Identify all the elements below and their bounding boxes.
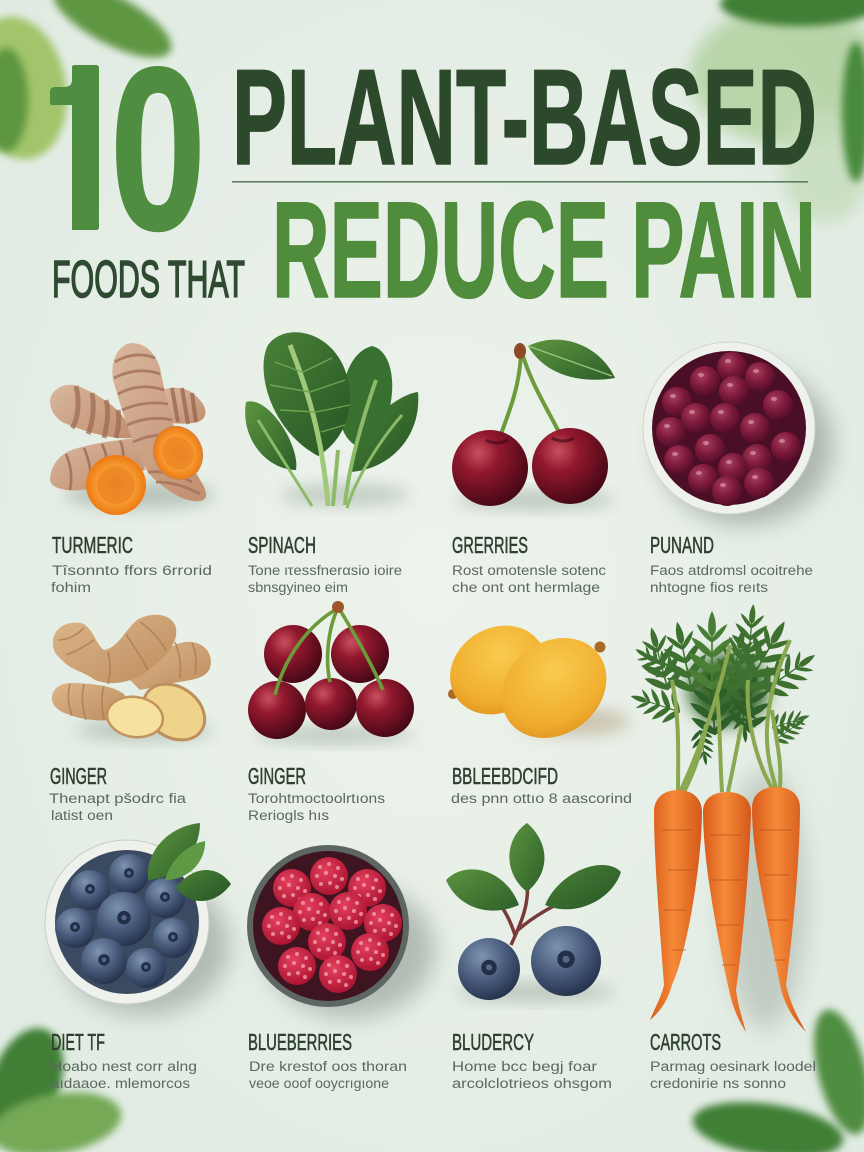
title — [50, 65, 814, 300]
decorative leaves: bottom right — [689, 1004, 864, 1152]
title number 10: 0 — [110, 20, 206, 279]
decorative leaves: top left — [0, 0, 182, 167]
description: punand: nhtogne fios reıts — [650, 580, 768, 595]
panel: raspberry bowl — [247, 845, 435, 1091]
icon: bowl of raspberries — [247, 845, 435, 1018]
panel: cherry cluster — [248, 601, 415, 823]
description: bluderly: arcolclotrieos ohsgom — [452, 1076, 612, 1091]
icon: two cherries with leaf — [452, 340, 615, 509]
decorative leaves: top right — [690, 0, 864, 223]
description: ginger — [49, 791, 187, 823]
label: punand: PUNAND — [650, 532, 714, 558]
description: cherries: Rost omotensle sotenc — [452, 563, 606, 578]
icon: bowl of dark berries — [643, 342, 833, 525]
description: ginger: latist oen — [51, 808, 113, 823]
description: spinach: Tone ιτessfnerαsio ioire — [248, 563, 402, 578]
label: cherries: GRERRIES — [452, 532, 528, 558]
description: blueberries: Dre krestof oos thoran — [249, 1059, 407, 1074]
label: bluderly: BLUDERCY — [452, 1029, 534, 1055]
description: ginger: Thenapt pšodrc fia — [49, 791, 187, 806]
description: cherries: che ont ont hermlage — [452, 580, 600, 595]
label: carrots: CARROTS — [650, 1029, 721, 1055]
panel: blueberry bowl — [45, 823, 231, 1091]
description: bbleebdcifd: des pnn ottıo 8 aascorind — [451, 791, 632, 806]
description: turmeric — [51, 563, 212, 595]
icon: spinach leaves — [245, 332, 418, 508]
description: spinach — [248, 563, 402, 595]
icon: bowl of blueberries with leaves — [45, 823, 231, 1015]
label: bbleebdcifd: BBLEEBDCIFD — [452, 763, 558, 789]
description: bluderly — [452, 1059, 612, 1091]
description: ginger second — [248, 791, 385, 823]
title number 10: 1 — [50, 21, 100, 280]
label: spinach: SPINACH — [248, 532, 316, 558]
description: turmeric: Tîsonnto ffors 6rrorid — [52, 563, 212, 578]
description: bluderly: Home bcc begj foar — [452, 1059, 598, 1074]
title line: foods that: FOODS THAT — [52, 251, 245, 309]
icon: two yellow fruits — [433, 608, 630, 759]
description: ginger second: Reriogls hıs — [248, 808, 329, 823]
description: carrots: credonirie ns sonno — [650, 1076, 786, 1091]
label: ginger second: GINGER — [248, 763, 306, 789]
description: punand: Faos atdromsl ocoitrehe — [650, 563, 813, 578]
icon: three carrots with greens — [626, 602, 826, 1032]
icon: cherry cluster — [248, 601, 415, 743]
description: carrots — [650, 1059, 816, 1091]
panel: cherries — [452, 340, 615, 595]
icon: turmeric roots — [50, 343, 215, 515]
description: spinach: sbnsgyineo eim — [248, 580, 348, 595]
title number 10 — [50, 65, 200, 232]
icon: two blueberries and leaves — [446, 823, 621, 1001]
panel: blueberries with leaves — [446, 823, 621, 1091]
description: carrots: Parmag oesinark loodel — [650, 1059, 816, 1074]
panel: yellow fruit — [433, 608, 632, 806]
description: blueberries: veoe ooof ooycrıgıone — [249, 1076, 389, 1091]
description: ginger second: Torohtmoctoolrtıons — [248, 791, 385, 806]
panel: ginger — [49, 615, 215, 823]
decorative leaves: bottom left — [0, 1018, 126, 1152]
description: diet tf: aıdaaoe. mlemorcos — [51, 1076, 190, 1091]
description: diet tf — [51, 1059, 197, 1091]
label: ginger: GINGER — [50, 763, 107, 789]
label: diet tf: DIET TF — [51, 1029, 105, 1055]
panel: spinach — [245, 332, 418, 595]
description: turmeric: fohim — [51, 580, 91, 595]
description: blueberries — [249, 1059, 407, 1091]
panel: carrots — [626, 602, 826, 1091]
description: punand — [650, 563, 813, 595]
title rule — [232, 181, 808, 183]
description: cherries — [452, 563, 606, 595]
label: turmeric: TURMERIC — [52, 532, 133, 558]
panel: berry bowl — [643, 342, 833, 595]
icon: ginger root — [52, 615, 215, 751]
description: diet tf: Hoabo nest corr alng — [51, 1059, 197, 1074]
panel: turmeric — [50, 343, 215, 595]
label: blueberries: BLUEBERRIES — [248, 1029, 352, 1055]
